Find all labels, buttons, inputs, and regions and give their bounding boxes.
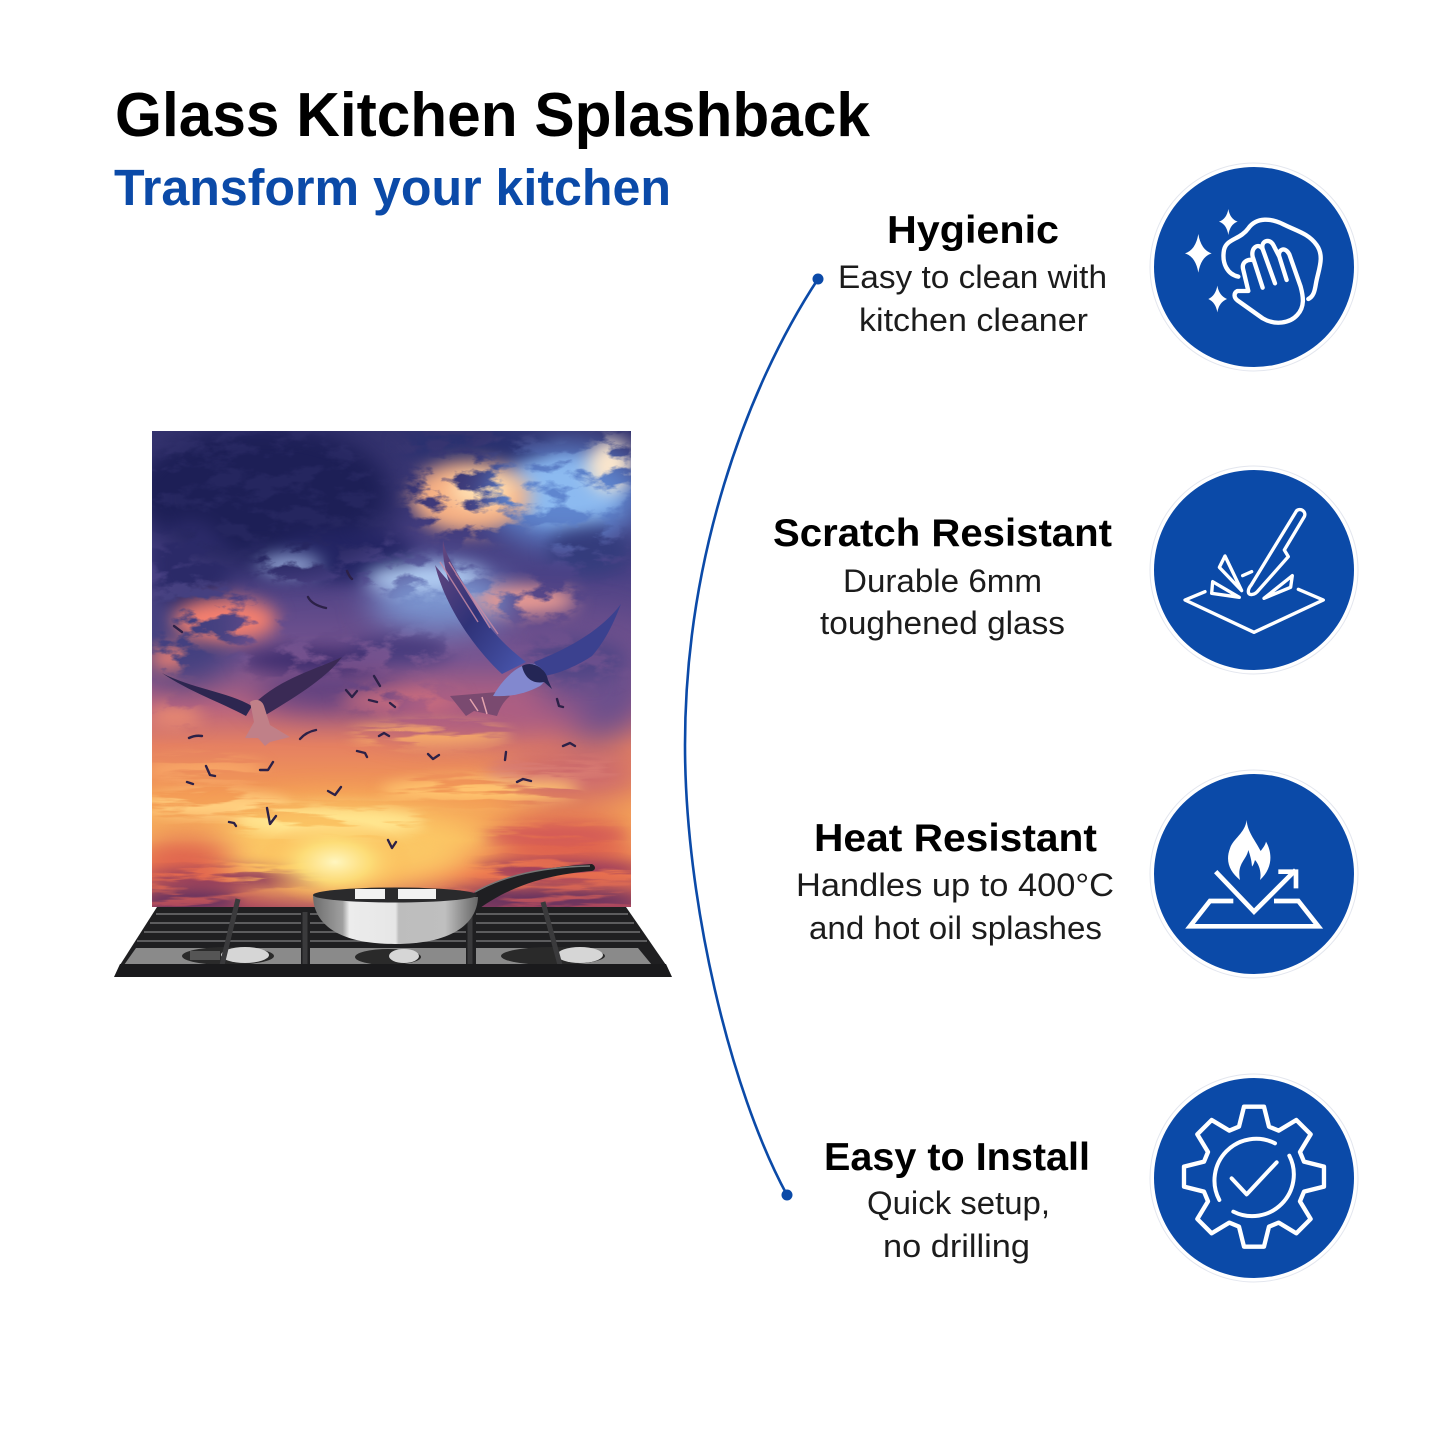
small bird left: [162, 657, 342, 746]
gas hob: [114, 899, 672, 977]
burner right: [501, 947, 605, 965]
icon: flame over heat-resistant surface: [1150, 770, 1358, 978]
description: Handles up to 400°C: [796, 867, 1114, 903]
description: [867, 1185, 1050, 1264]
frying pan: [313, 864, 595, 944]
description: [838, 259, 1107, 338]
description: Quick setup,: [867, 1185, 1050, 1221]
icon: hand wiping with sparkles: [1150, 163, 1358, 371]
heading: Heat Resistant: [814, 817, 1097, 860]
heading: Scratch Resistant: [773, 512, 1112, 555]
feature text: Hygienic: [838, 209, 1107, 338]
flock of small birds: [174, 571, 575, 848]
title: Glass Kitchen Splashback: [115, 81, 870, 150]
description: [820, 563, 1065, 641]
hob front edge: [114, 964, 672, 977]
description: [796, 867, 1114, 946]
sunset sky panel: [130, 425, 650, 910]
icon: knife scratching glass: [1150, 466, 1358, 674]
large bird: [435, 540, 621, 716]
description: and hot oil splashes: [809, 910, 1102, 946]
description: no drilling: [883, 1228, 1030, 1264]
feature text: Scratch Resistant: [773, 512, 1112, 641]
description: Easy to clean with: [838, 259, 1107, 295]
burner left: [182, 947, 274, 965]
heading: Hygienic: [887, 209, 1059, 252]
description: kitchen cleaner: [859, 302, 1088, 338]
feature text: Easy to Install: [824, 1136, 1090, 1264]
heading: Easy to Install: [824, 1136, 1090, 1179]
description: Durable 6mm: [843, 563, 1042, 599]
icon: gear with check mark: [1150, 1074, 1358, 1282]
subtitle: Transform your kitchen: [114, 159, 671, 216]
connector curve with end dots: [685, 274, 824, 1200]
pan supports: [222, 899, 560, 965]
feature text: Heat Resistant: [796, 817, 1114, 946]
burner centre: [355, 949, 421, 965]
product image: splashback above gas hob: [114, 425, 672, 977]
description: toughened glass: [820, 605, 1065, 641]
